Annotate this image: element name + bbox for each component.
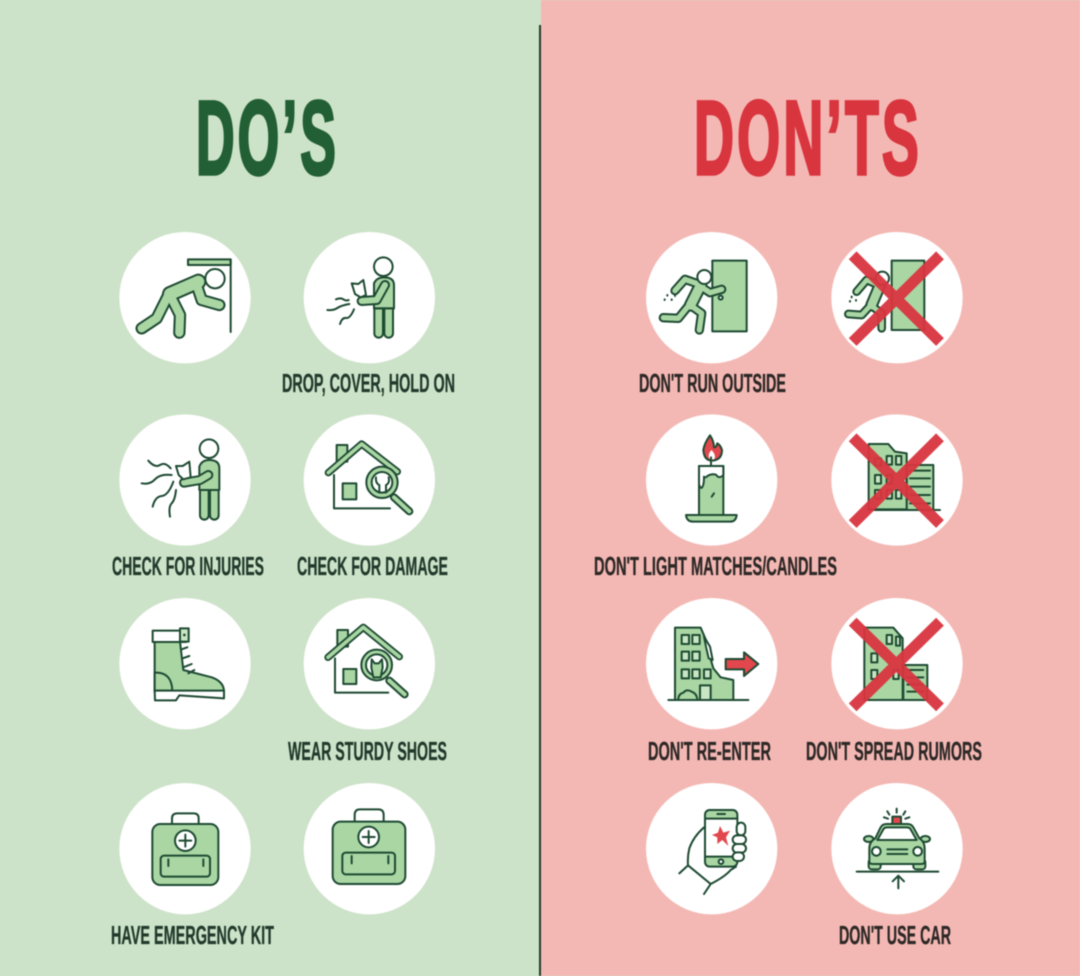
label: don't run outside: DON'T RUN OUTSIDE [639, 368, 786, 398]
panel: don'ts [541, 0, 1080, 976]
icon: hand holding phone [646, 783, 777, 914]
label: don't use car: DON'T USE CAR [839, 920, 951, 950]
label: wear sturdy shoes: WEAR STURDY SHOES [288, 736, 447, 766]
label: have emergency kit: HAVE EMERGENCY KIT [111, 920, 274, 950]
icon: person checking for injuries [119, 414, 251, 546]
icon: house with magnifier and wrench [304, 414, 435, 546]
center divider [539, 25, 541, 976]
heading: do's: DO’S [196, 80, 339, 197]
icon: person taking cover under door frame [119, 232, 251, 363]
icon: lit candle [646, 414, 777, 546]
label: check for injuries: CHECK FOR INJURIES [112, 551, 264, 581]
label: don't light matches/candles: DON'T LIGHT MATCHES/CANDLES [594, 551, 837, 581]
label: drop, cover, hold on: DROP, COVER, HOLD ON [282, 368, 455, 398]
icon: office building crossed out [831, 414, 963, 546]
icon: sturdy boot [119, 598, 251, 729]
icon: emergency kit [119, 783, 251, 914]
icon: damaged building with exit arrow [646, 598, 777, 729]
label: don't re-enter: DON'T RE-ENTER [648, 736, 771, 766]
panel: do's [0, 0, 541, 976]
icon: running to door crossed out [831, 232, 963, 363]
icon: building crossed out [831, 598, 963, 729]
icon: emergency kit, second view [304, 783, 435, 914]
icon: house with magnifier [304, 598, 435, 729]
icon: person with hand raised and tremor lines [304, 232, 435, 363]
icon: person running to door [646, 232, 777, 363]
icon: car with beacon on road [831, 783, 963, 914]
label: check for damage: CHECK FOR DAMAGE [297, 551, 448, 581]
